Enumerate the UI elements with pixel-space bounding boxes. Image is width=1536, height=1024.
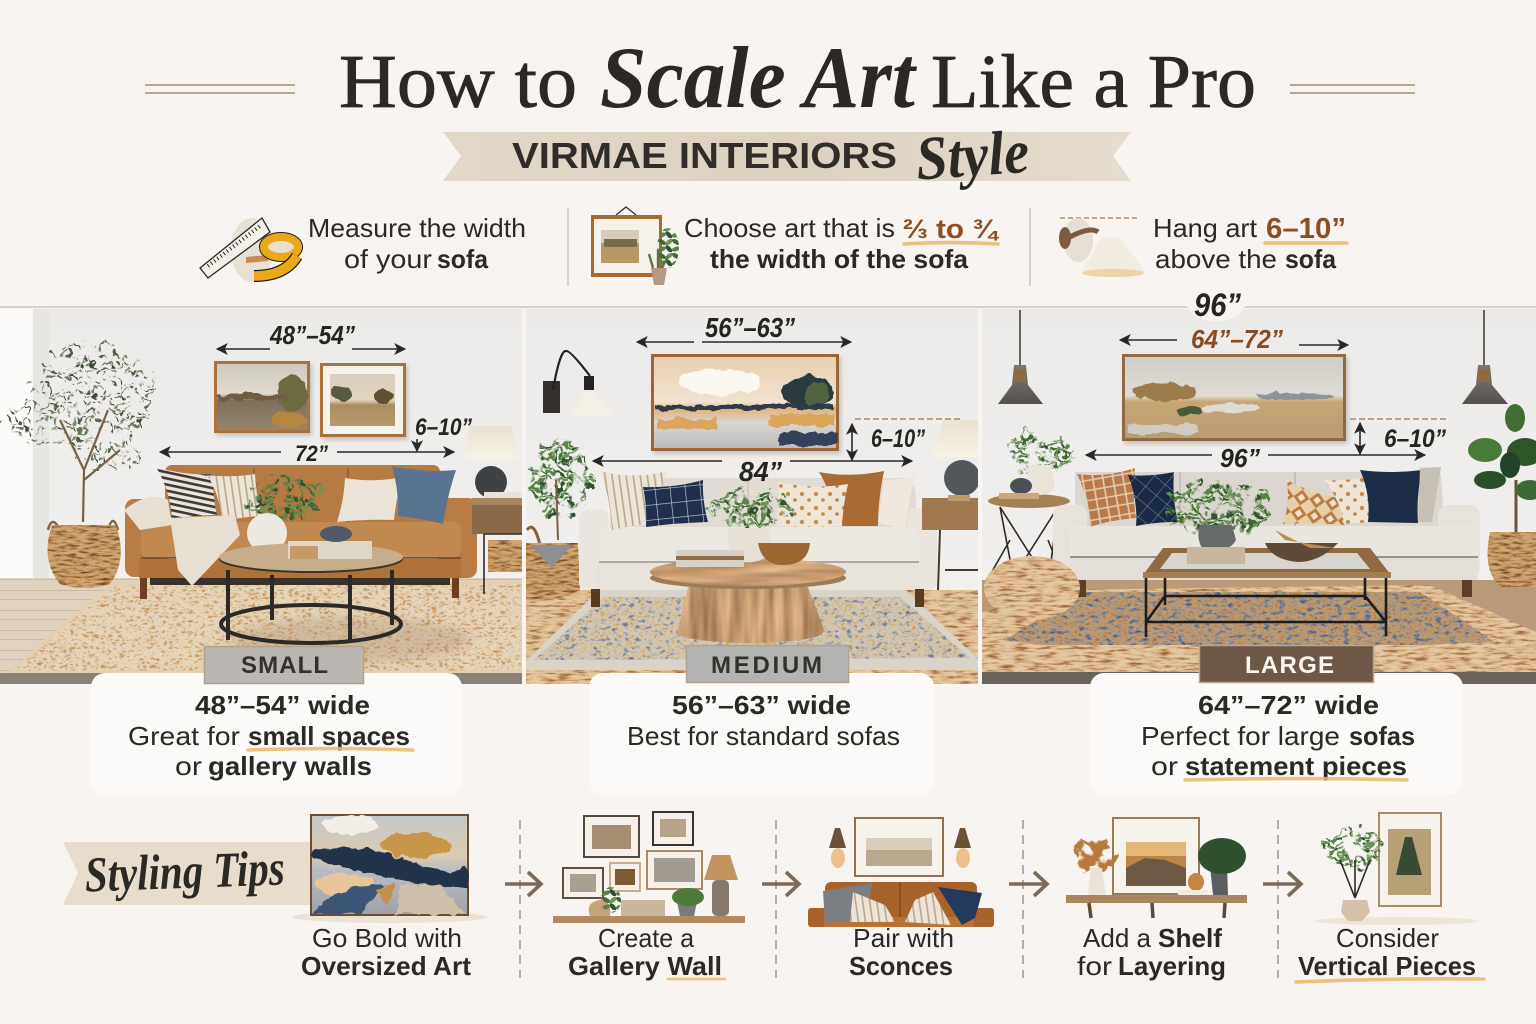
badge: small (204, 646, 364, 684)
card text: medium (627, 690, 900, 751)
tip 4 text: for (1077, 951, 1112, 981)
dimension: art width: 48”–54” (269, 320, 355, 350)
card text: medium: Best for standard sofas (627, 721, 900, 751)
title right rule (1290, 85, 1415, 93)
separator (519, 820, 521, 978)
step 3 text: sofa (1285, 244, 1337, 274)
pouf (984, 556, 1080, 620)
tip 4 text: Shelf (1158, 923, 1222, 953)
panel: small room (0, 309, 522, 684)
step 3 text: 6–10” (1266, 213, 1346, 245)
step 2: choose (591, 207, 1000, 285)
coffee table with decor (1143, 482, 1391, 637)
pendant lamps (998, 310, 1508, 404)
pillows (156, 466, 456, 524)
badge: small: SMALL (241, 652, 328, 679)
sofa (125, 465, 477, 599)
tip 4 text: Layering (1118, 951, 1226, 981)
wall (49, 309, 522, 448)
badge: large: LARGE (1245, 652, 1334, 679)
step 1 text (308, 213, 526, 274)
dimension: hang height: 6–10” (871, 425, 925, 453)
step 3 text: Hang art (1153, 213, 1258, 243)
sofa (1053, 472, 1480, 597)
icon: gallery frames on shelf (553, 812, 745, 923)
panel: large room (982, 309, 1536, 684)
arrow (1263, 872, 1301, 896)
card text: small (128, 690, 413, 781)
step 3: hang (1059, 213, 1347, 277)
icon: wall sconce (1059, 218, 1145, 277)
title: Scale Art (600, 30, 917, 127)
tip 3 text (849, 923, 954, 981)
subtitle ribbon: Style (914, 118, 1031, 194)
side table and lamp (465, 426, 522, 594)
potted plant (526, 438, 590, 601)
tip 1 text: Go Bold with (312, 923, 462, 953)
card: medium (589, 646, 934, 795)
dimension: sofa width: 96” (1220, 443, 1260, 473)
top rule of room panels (0, 306, 1536, 308)
plant and vase on table (247, 476, 323, 553)
wall sconce (543, 350, 594, 413)
step 2 text: ⅔ to ¾ (903, 214, 1000, 244)
dimension: hang height (852, 419, 961, 460)
separator (775, 820, 777, 978)
pillows (1077, 467, 1441, 527)
floor and rugs (526, 590, 978, 684)
tip 5: vertical pieces (1296, 813, 1484, 982)
tip 5 text (1296, 923, 1484, 982)
title: Like a Pro (931, 40, 1256, 124)
divider (567, 208, 569, 286)
tip 2 text: Gallery Wall (568, 951, 722, 981)
title left rule (145, 85, 295, 93)
icon: ruler and tape (200, 218, 298, 282)
step 2 text: Choose art that is (684, 213, 895, 243)
tip 3 text: Pair with (853, 923, 954, 953)
tip 4 text: Add a (1083, 923, 1152, 953)
step 1 text: of your (344, 244, 432, 274)
side table and plant (988, 430, 1072, 575)
card text: large: statement pieces (1185, 751, 1407, 781)
dimension: sofa width: 84” (739, 456, 782, 487)
arrow (1009, 872, 1047, 896)
arrow (505, 872, 541, 896)
fiddle leaf plant and basket (1468, 404, 1536, 587)
overall width label: 96 inches: 96” (1194, 287, 1241, 323)
tip 5 text: Vertical Pieces (1298, 951, 1476, 981)
sofa (579, 478, 937, 607)
tip 3: sconces (808, 818, 994, 981)
card text: small: or (175, 751, 202, 781)
dimension: hang height: 6–10” (1384, 425, 1446, 453)
step 1: measure (200, 213, 526, 282)
dimension: hang height (415, 414, 472, 451)
dimension: hang height (1350, 419, 1447, 454)
tip 2 text (568, 923, 725, 981)
dimension: art width: 64”–72” (1191, 324, 1283, 354)
tip 4: shelf (1066, 818, 1247, 981)
wall art (1122, 354, 1348, 444)
tip 1 text: Oversized Art (301, 951, 471, 981)
card text: medium: 56”–63” wide (672, 690, 851, 720)
separator (1277, 820, 1279, 978)
card text: large: 64”–72” wide (1198, 690, 1379, 720)
icon: tall frame with plant (1315, 813, 1479, 925)
step 3 text: above the (1155, 244, 1277, 274)
title (339, 30, 1256, 127)
coffee table with decor (650, 488, 846, 643)
card: large (1090, 646, 1463, 795)
card text: large (1141, 690, 1415, 781)
badge: medium (686, 646, 848, 682)
styling tips ribbon: Styling Tips (84, 840, 286, 902)
card text: small: Great for (128, 721, 240, 751)
tip 3 text: Sconces (849, 951, 953, 981)
tip 1: oversized art (292, 814, 488, 981)
subtitle ribbon: VIRMAE INTERIORS (512, 135, 897, 176)
tip 5 text: Consider (1336, 923, 1439, 953)
rug (0, 582, 522, 684)
separator (1022, 820, 1024, 978)
badge: medium: MEDIUM (711, 652, 822, 679)
basket with tree (2, 342, 156, 588)
arrow (762, 872, 799, 896)
panel: medium room (526, 309, 980, 684)
wall art (651, 354, 841, 454)
dimension: hang height: 6–10” (415, 414, 472, 441)
throw blanket (124, 497, 240, 586)
tip 1 text (301, 923, 471, 981)
step 3 text (1153, 213, 1347, 274)
step 2 text: the width of the sofa (710, 244, 969, 274)
icon: framed art with plant (591, 207, 679, 285)
divider (1029, 208, 1031, 286)
tip 2: gallery wall (553, 812, 745, 981)
dimension: art width: 56”–63” (705, 312, 795, 343)
badge: large (1200, 646, 1374, 682)
pillows (600, 471, 915, 530)
styling tips row (63, 812, 1484, 982)
art: abstract landscape (292, 814, 488, 923)
floor (0, 578, 522, 673)
icon: shelf with art and plants (1066, 818, 1247, 918)
icon: sofa with sconces and art (808, 818, 994, 927)
card text: small: 48”–54” wide (195, 690, 370, 720)
coffee table (219, 526, 403, 643)
wall (526, 309, 978, 450)
step 1 text: Measure the width (308, 213, 526, 243)
card text: large: sofas (1349, 721, 1415, 751)
floor and rugs (982, 580, 1536, 684)
step 2 text (684, 213, 1000, 274)
tip 2 text: Create a (598, 923, 695, 953)
subtitle ribbon (443, 118, 1131, 194)
wall art pair (214, 361, 408, 440)
dimension: sofa width: 72” (295, 441, 328, 466)
tip 4 text (1077, 923, 1226, 981)
steps row (200, 207, 1347, 286)
card text: large: or (1151, 751, 1178, 781)
title: How to (339, 40, 577, 124)
curtain (0, 309, 49, 594)
card: small (91, 646, 462, 795)
wall (982, 309, 1536, 450)
card text: large: Perfect for large (1141, 721, 1340, 751)
title block (145, 30, 1415, 127)
step 1 text: sofa (437, 244, 489, 274)
table lamp and nightstand (922, 420, 980, 590)
card text: small: small spaces (248, 721, 410, 751)
card text: small: gallery walls (208, 751, 372, 781)
